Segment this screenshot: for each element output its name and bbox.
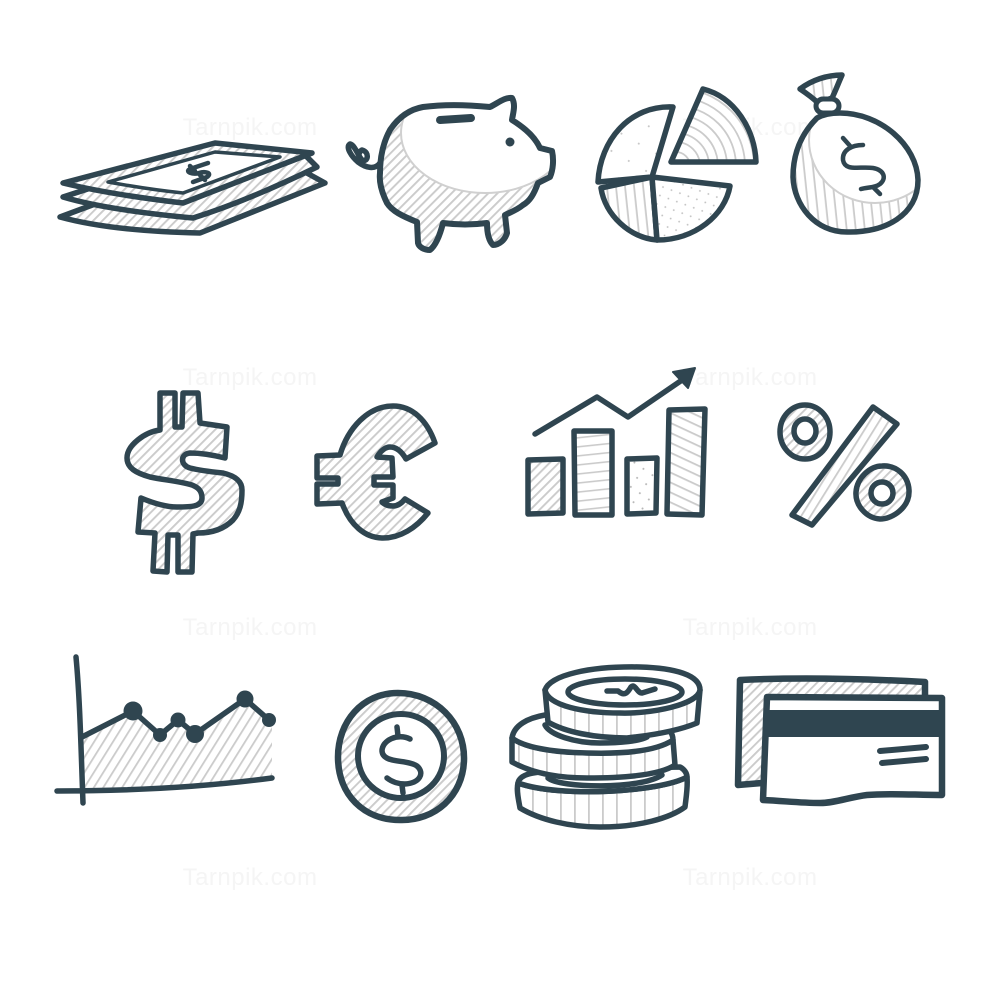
watermarks xyxy=(183,114,817,891)
icon: area line chart xyxy=(57,657,276,803)
icon: money bag xyxy=(793,75,941,232)
watermarks: Tarnpik.com xyxy=(683,614,817,641)
icon: stack of coins xyxy=(512,667,700,827)
watermarks: Tarnpik.com xyxy=(683,864,817,891)
watermarks: Tarnpik.com xyxy=(683,114,817,141)
icon: credit cards xyxy=(738,679,942,803)
icon: euro sign xyxy=(317,406,435,538)
watermarks: Tarnpik.com xyxy=(183,114,317,141)
icon: piggy bank xyxy=(346,94,556,253)
icon: bar chart with rising arrow xyxy=(528,368,705,515)
icon: dollar coin xyxy=(338,693,464,820)
icon: pie chart xyxy=(598,88,756,244)
icon: stack of banknotes xyxy=(60,143,325,233)
icon: dollar sign xyxy=(127,393,242,572)
watermarks: Tarnpik.com xyxy=(183,864,317,891)
watermarks: Tarnpik.com xyxy=(683,364,817,391)
watermarks: Tarnpik.com xyxy=(183,614,317,641)
icon: percent sign xyxy=(780,405,909,525)
watermarks: Tarnpik.com xyxy=(183,364,317,391)
